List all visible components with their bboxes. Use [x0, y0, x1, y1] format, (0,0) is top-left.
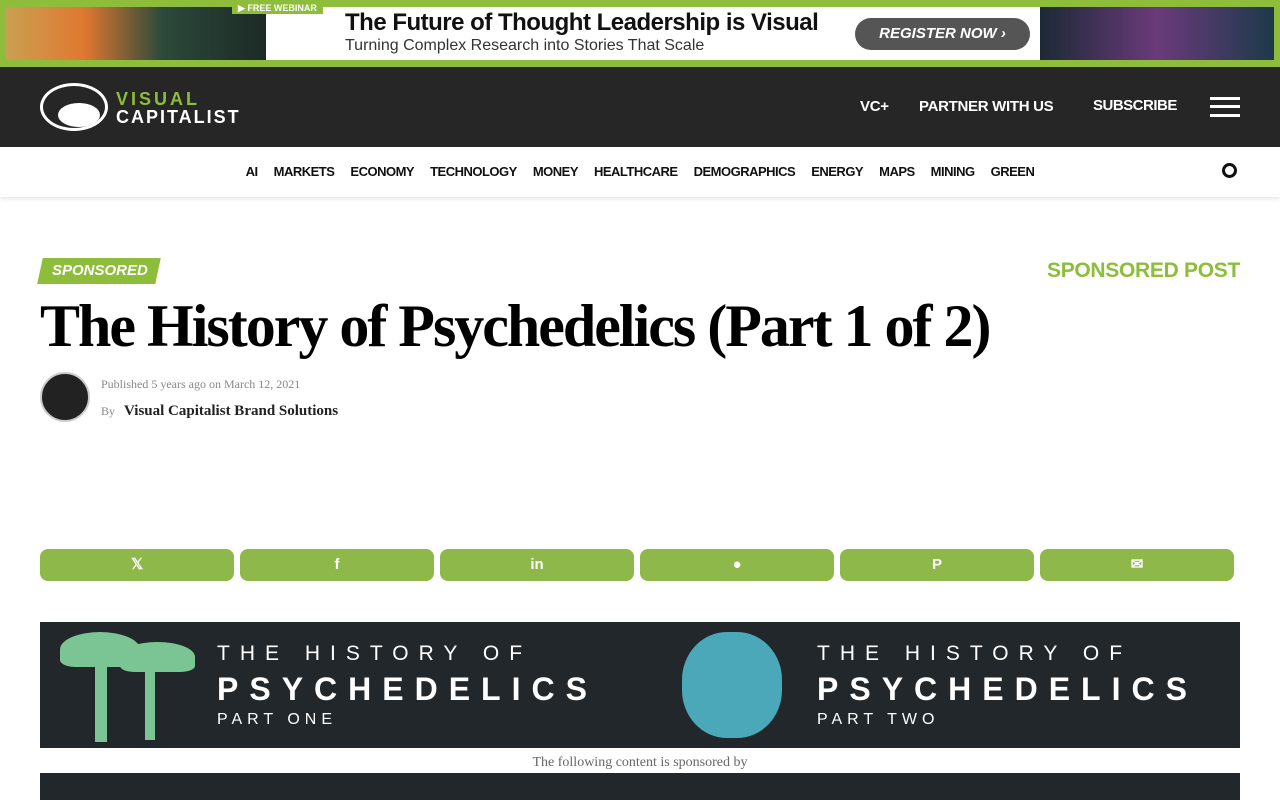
ad image left	[6, 7, 266, 60]
icon: menu	[1210, 97, 1240, 117]
author avatar	[40, 372, 90, 422]
text: ●	[732, 556, 742, 573]
ad banner	[0, 0, 1280, 67]
banner: psychedelics: PSYCHEDELICS	[817, 671, 1198, 707]
share buttons	[40, 549, 234, 581]
logo: VISUAL	[116, 89, 200, 109]
nav: AI MARKETS ECONOMY TECHNOLOGY MONEY HEALTHCARE DEMOGRAPHICS ENERGY MAPS MINING GREEN	[246, 164, 1034, 179]
header bar: PARTNER WITH US	[919, 98, 1053, 115]
logo: CAPITALIST	[116, 107, 241, 127]
header bar: SUBSCRIBE	[1093, 97, 1177, 114]
header bar	[0, 67, 1280, 147]
dark panel bottom	[40, 773, 1240, 800]
nav	[0, 147, 1280, 197]
text: P	[932, 556, 942, 573]
logo	[40, 83, 241, 131]
ad button	[855, 18, 1030, 50]
sponsor note: The following content is sponsored by	[532, 755, 748, 770]
icon: search	[1222, 163, 1237, 178]
banner: psychedelics: PART ONE	[217, 711, 337, 728]
banner: psychedelics: THE HISTORY OF	[217, 642, 532, 665]
title: The History of Psychedelics (Part 1 of 2)	[40, 293, 989, 359]
banner: psychedelics: PART TWO	[817, 711, 939, 728]
text: ✉	[1131, 556, 1143, 573]
ad banner: ▶ FREE WEBINAR	[238, 3, 317, 13]
ad banner: Turning Complex Research into Stories That Scale	[345, 37, 704, 54]
banner: psychedelics	[40, 622, 1240, 748]
sponsored tag	[37, 258, 161, 284]
banner: psychedelics: THE HISTORY OF	[817, 642, 1132, 665]
text: f	[334, 556, 340, 573]
icon: mushrooms	[60, 632, 195, 742]
top links: VC+	[860, 98, 889, 115]
ad headline: The Future of Thought Leadership is Visual	[345, 9, 818, 36]
banner: psychedelics: PSYCHEDELICS	[217, 671, 598, 707]
text: SPONSORED	[52, 262, 148, 279]
icon: brain	[682, 632, 782, 738]
sponsored post label: SPONSORED POST	[1047, 259, 1240, 282]
text: in	[530, 556, 544, 573]
text: By Visual Capitalist Brand Solutions	[101, 403, 338, 419]
ad button: REGISTER NOW ›	[879, 25, 1006, 42]
share buttons: 𝕏	[131, 556, 143, 573]
byline: Published 5 years ago on March 12, 2021	[101, 377, 300, 391]
